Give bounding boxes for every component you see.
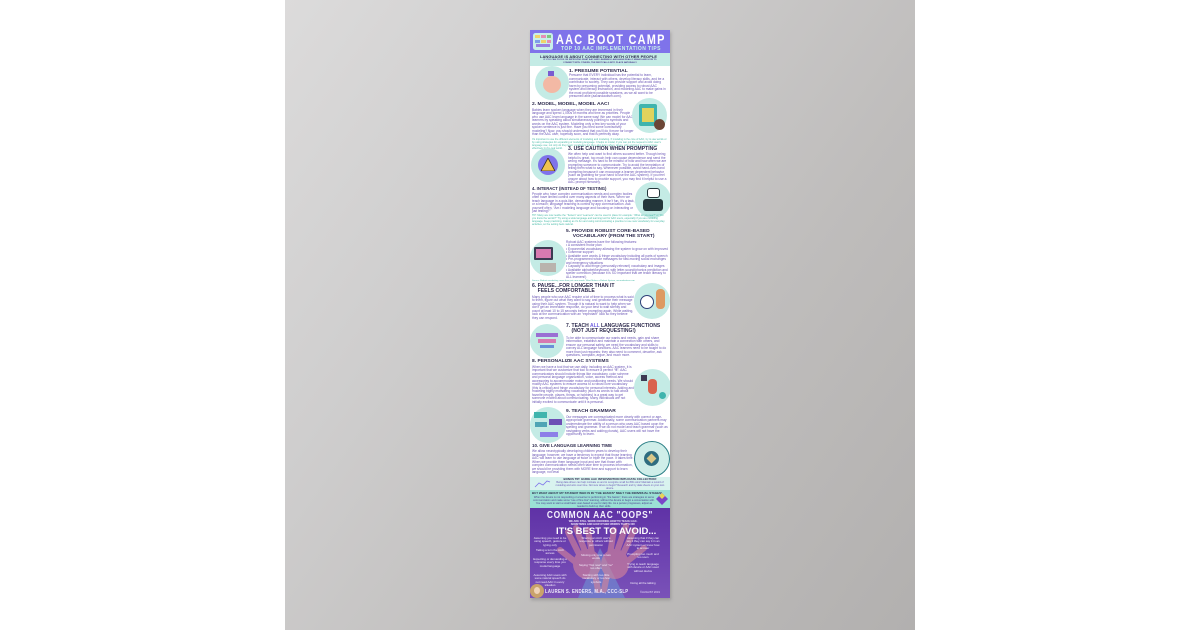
icon: head bbox=[535, 66, 569, 100]
photo backdrop wall bbox=[285, 0, 915, 630]
heading: 6. PAUSE...FOR LONGER THAN IT bbox=[532, 283, 615, 289]
column 1 bbox=[533, 536, 567, 587]
tip 6 bbox=[532, 283, 670, 320]
icon: data line chart bbox=[534, 480, 550, 488]
item: Moving only one to two words bbox=[581, 553, 611, 560]
body: Many people who use AAC require a lot of time to process what is said to them, figure out what they want to say, and generate their message using their AAC system. Though it is natural to want to help when we don’t get an immediate response, do your best to wait silently and count at least 10 to 15 seconds before prompting again. While waiting, look at the communication with an “expectant” look so they believe they can respond. bbox=[532, 294, 634, 320]
body: To be able to communicate our wants and needs, gain and share information, establish and maintain a connection with others, and ensure our personal safety, we need the vocabulary and skills to convey ALL language functions. AAC learners need to be taught to do more than just requests; they also need to comment, describe, ask questions, complain, argue, and much more. bbox=[566, 336, 666, 357]
heading: 3. USE CAUTION WHEN PROMPTING bbox=[568, 146, 657, 152]
tip 3 bbox=[531, 146, 666, 184]
bonus tip band bbox=[530, 477, 670, 491]
footnote: Source: Robust vocabulary, more than just core words: What Makes a Robust System, aacandautism.com bbox=[532, 280, 635, 282]
body: • Pre-programmed whole messages for fast-moving social exchanges and emergency situations bbox=[566, 257, 666, 264]
icon: personalized body bbox=[634, 369, 671, 406]
bonus heading: BONUS TIP: GUIDE AAC INTERVENTION WITH DATA COLLECTION! bbox=[564, 477, 656, 481]
column 3 bbox=[626, 536, 660, 585]
body bbox=[566, 240, 668, 279]
body: People who have complex communication needs and complex bodies often have limited control over many aspects of their lives. When we teach language in a quiz-like, demanding manner, it isn’t fun, it’s a task, or a lesson; language teaching is control by app communication. Ask yourself often, “Am I modeling language and focusing on interacting or just testing?” bbox=[532, 192, 635, 213]
body: When we have a tool that we use daily, including an AAC system, it is important that we customize that tool to ensure a perfect “fit”. AAC communicators should include things like vocabulary, color scheme and personal language organization, voice, access method and accessories to accommodate motor and positioning needs. We should modify AAC systems to ensure access to a robust core vocabulary (this is critical) and fringe vocabulary for personal interests. Adding and modeling highly motivating vocabulary (such as words to talk about favorite people, places, things, or hobbies) is a great way to get someone excited about communicating. Many individuals are not initially excited to communicate until it is personal. bbox=[532, 364, 634, 404]
bonus text: Being data driven can help motivate us and to recognize small but BIG wins! Maintain a record of modeling and wins over time. Not sure where to begin? Research and try data sheets on your own device. bbox=[556, 481, 664, 490]
tip 8 bbox=[532, 359, 670, 406]
item: Prompting too much and too soon bbox=[627, 552, 659, 559]
icon: grammar labels bbox=[530, 407, 566, 443]
icon: stacked cube bbox=[656, 493, 668, 505]
oops title: COMMON AAC "OOPS" bbox=[547, 509, 653, 521]
heading bbox=[566, 323, 660, 334]
tip 10 bbox=[532, 441, 670, 477]
oops section bbox=[530, 508, 670, 598]
tip 7 bbox=[530, 323, 666, 358]
intro band bbox=[530, 53, 670, 66]
body: • A consistent motor plan bbox=[566, 243, 602, 247]
icon: word cloud bbox=[530, 324, 564, 358]
oops subtitle: WE ARE STILL WORK KNOWING HOW TO TEACH AAC. bbox=[569, 520, 637, 522]
oops subtitle bbox=[568, 520, 638, 526]
icon: stopwatch and hand bbox=[634, 283, 670, 319]
intro heading: LANGUAGE IS ABOUT CONNECTING WITH OTHER PEOPLE bbox=[540, 54, 657, 58]
heading: FEELS COMFORTABLE bbox=[538, 288, 595, 294]
heading: VOCABULARY (FROM THE START) bbox=[573, 234, 654, 239]
column 2 bbox=[579, 536, 613, 584]
logo bbox=[533, 33, 553, 50]
subtitle: TOP 10 AAC IMPLEMENTATION TIPS bbox=[561, 46, 661, 52]
heading: 1. PRESUME POTENTIAL bbox=[569, 68, 628, 74]
note: It’s important to use the different elements of modeling and modeling. If modeling is the core of AAC, try to use words or by using strategies for expanding or modeling language. It helps to model, if you can put the request to AAC user’s language use; not only do they learn vocabulary but they also learn when, where, why and how to communicate effectively in the real world. bbox=[532, 138, 667, 150]
item: Saying "Not now" and "no" too often bbox=[579, 563, 613, 570]
note: TIP: Many are now realize the “Testers” and “Learners” can be used in place for example: “What do you see?” or “Do you know the words?” Try using a wide language and learning tool for AAC users, especially if you are modeling language. Keep practicing, making as it’s fun and using communicating a practice to use new vocabulary for everyday activities, so the setting feels natural. bbox=[532, 214, 665, 226]
icon: device bbox=[632, 98, 667, 133]
tip 4 bbox=[532, 182, 670, 226]
heading bbox=[532, 283, 615, 294]
item: Assuming that if they can say it they can say it in an AAC system or know how to answer bbox=[626, 536, 660, 550]
item: Doing all the talking bbox=[630, 581, 656, 585]
what about band bbox=[530, 490, 670, 508]
icon: people talking bbox=[635, 182, 671, 218]
heading bbox=[566, 229, 654, 239]
body: • Available core words & fringe vocabulary including all parts of speech bbox=[566, 254, 668, 258]
body: We allow neurotypically developing children years to develop their language; however, we have a tendency to expect that those learning AAC will learn to use language at twice or triple the pace. It takes time. When we provide them language input and see that those with complex communication needs often take time to process information, we should be providing them with MORE time and support to learn language, not less! bbox=[532, 449, 634, 474]
icon: warning bbox=[531, 148, 565, 182]
author photo bbox=[530, 584, 544, 598]
band heading: BUT WHAT ABOUT MY STUDENT WHO IS IN "THE BASICS" MEET THE INDIVIDUAL STAGES! bbox=[532, 491, 662, 495]
item: Starting with too little vocabulary or too few symbols bbox=[582, 573, 610, 584]
body: Babies learn spoken language when they are immersed in their language and spend 1,000s of months and time as priorities. People who use AAC learn language in the same way! We can model for AAC learners by speaking aloud simultaneously pointing to symbols and words on the AAC system. Modeling only a few key words of your spoken sentence is just fine. Have you tried some core/activity modeling? Now, you should understand that you’ll do it more for longer than the AAC user, hopefully soon, and that is perfectly okay. bbox=[532, 108, 634, 136]
body: Presume that EVERY individual has the potential to learn, communicate, interact with others, develop literacy skills, and be a contributor to society. They can provide support and avoid doing harm by presuming potential, providing access to robust AAC system and literacy instruction, and modeling AAC to make gains in the most proficient possible speakers, as we all want to be presumed able (aacandautism.com). bbox=[569, 73, 666, 98]
title: AAC BOOT CAMP bbox=[556, 31, 666, 47]
item: Assuming AAC users with some natural speech do not need AAC in every situation bbox=[533, 573, 567, 587]
tip 5 bbox=[530, 229, 668, 282]
body: Our messages are communicated more clearly with correct or age-appropriate grammar. Additionally, some communication partners may underestimate the ability of a person who uses AAC based upon the spelling and grammar. If we do not model and teach grammar (such as navigating verbs and adding plurals), AAC users will not have the opportunity to learn. bbox=[566, 414, 668, 436]
author credit: LAUREN S. ENDERS, M.A., CCC-SLP bbox=[545, 589, 628, 595]
item: Taking a turn the AAC access bbox=[536, 548, 564, 555]
poster bbox=[530, 30, 670, 598]
body: • Capacity to add fringe (personally-relevant) vocabulary and images bbox=[566, 264, 665, 268]
header band bbox=[530, 30, 670, 53]
heading: 8. PERSONALIZE AAC SYSTEMS bbox=[532, 359, 609, 364]
avoid heading: IT'S BEST TO AVOID... bbox=[556, 526, 656, 537]
body: • Available alphabet/keyboard, with letter-sound/phonics prediction and speller correction (because it is SO important that we teach literacy to ALL learners!) bbox=[566, 268, 668, 278]
heading: 5. PROVIDE ROBUST CORE-BASED bbox=[566, 229, 650, 234]
item: Sharing an AAC user's response to others without permission bbox=[579, 536, 613, 547]
body: We often help and want to find others succeed better. Though being helpful is great, too much help can cause dependence and send the wrong message. It’s hard to be mindful of how and how often we are prompting someone to communicate. Try to avoid the temptation of telling them what to say. Whenever possible, avoid hand-over-hand prompting because it can encourage a learner dependent behavior (such as grabbing for your hand to use the AAC system). If you feel unsure about how to provide support, you may find it helpful to use a AAC prompt hierarchy. bbox=[568, 152, 666, 184]
body: Robust AAC systems have the following features: bbox=[566, 240, 637, 244]
icon: AAC devices bbox=[530, 240, 566, 276]
tip 1 bbox=[535, 66, 666, 100]
illustration: hands bbox=[557, 523, 647, 598]
heading: 2. MODEL, MODEL, MODEL AAC! bbox=[532, 102, 609, 107]
oops subtitle: SOMETIMES AND HOW OTHER WORDS THAT'S OK! bbox=[571, 522, 635, 526]
body: • Grammar support bbox=[566, 250, 594, 254]
tip 9 bbox=[530, 407, 668, 443]
icon: clock gears bbox=[634, 441, 670, 477]
item: Trying to teach language with device or AAC used without device bbox=[627, 562, 659, 573]
heading: 4. INTERACT (INSTEAD OF TESTING) bbox=[532, 186, 606, 191]
heading: 10. GIVE LANGUAGE LEARNING TIME bbox=[532, 443, 612, 448]
heading: 7. TEACH ALL LANGUAGE FUNCTIONS bbox=[566, 323, 660, 329]
intro text: IF YOU CAN FOCUS ON IMPROVING WHAT AAC AND LEARNING LANGUAGE REALLY MEANS AND HOW TO CONNECT WITH OTHERS, THE REST FALLS INTO PLACE NATURALLY bbox=[543, 59, 657, 64]
item: Expecting or demanding a response every time you model language bbox=[533, 557, 567, 568]
heading: (NOT JUST REQUESTING!) bbox=[572, 328, 636, 334]
heading: 9. TEACH GRAMMAR bbox=[566, 409, 616, 414]
copyright: ©AUGUST 2019 bbox=[640, 591, 660, 594]
body: • Exponential vocabulary allowing the system to grow on with improved bbox=[566, 246, 668, 250]
tip 2 bbox=[532, 98, 667, 150]
band text: When the device is not responding or a learner is performing in "the basics", there are strategies to serve communication and make some "use of fine line" learning, without the device to begin a conversation with. You may want to start a small basic user-based to use for daily life. As a person progresses, adjust as needed to build up their skills. bbox=[533, 496, 655, 508]
item: Assuming you need to be using speech, gesture or typing only bbox=[534, 536, 566, 547]
